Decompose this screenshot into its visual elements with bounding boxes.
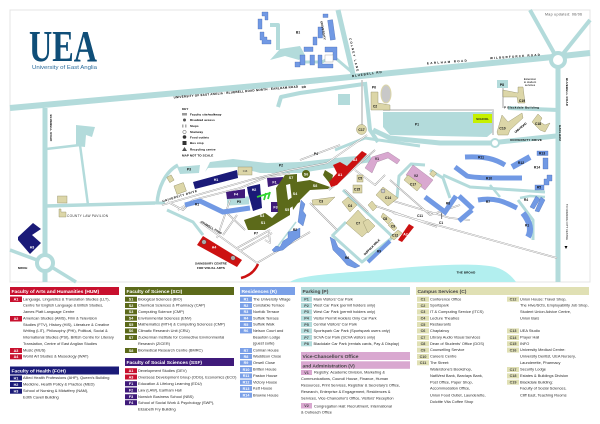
panel: Campus Services: C16 [510, 348, 516, 352]
panel: Campus Services: C11 [420, 361, 426, 365]
map frame [10, 10, 590, 282]
panel: Campus Services: Accommodation Office, [430, 386, 470, 391]
building: H3 [18, 223, 41, 254]
feature: school label box [473, 114, 492, 123]
science buildings: S4 [293, 192, 297, 196]
campus services buildings: C11 [417, 214, 423, 218]
panel: Residences: (guest suite) [253, 341, 275, 346]
panel: Parking: P1 [304, 298, 309, 302]
residence buildings: main group: R11 [478, 156, 484, 160]
panel: Campus Services: C13 [510, 329, 516, 333]
science buildings: S7 [289, 176, 293, 180]
residential buildings: north group [258, 12, 337, 68]
panel: Residences: Norfolk Terrace [253, 309, 279, 314]
panel: Parking: P2 [304, 304, 309, 308]
panel: Residences: R10 [243, 368, 249, 372]
panel: Residences: R14 [243, 394, 250, 398]
panel: Faculty of Social Sciences: Development Studies (DEV) [138, 368, 187, 373]
panel: Faculty of Arts and Humanities: A1 [14, 298, 18, 302]
social sciences buildings: F4 [234, 192, 238, 196]
road labels: TO NORWICH CITY CENTRE [565, 204, 569, 240]
road labels: WILBERFORCE ROAD [490, 53, 541, 60]
parking labels: P8 [500, 83, 504, 87]
campus services buildings: C3 [319, 200, 323, 204]
science buildings: S8 [313, 184, 317, 188]
panel: Campus Services: Sportspark [430, 303, 449, 308]
road labels: EARLHAM ROAD [427, 59, 468, 65]
panel: Residences: Waddison Close [253, 354, 281, 359]
panel: Vice-Chancellor's Office and Administration: Vice-Chancellor's Office [302, 354, 359, 360]
panel: Campus Services: Lecture Theatres [430, 315, 459, 320]
road labels: UNIVERSITY DRIVE [162, 189, 198, 203]
panel: Campus Services: UEA Studio [520, 328, 540, 333]
panel: Residences: R3 [244, 310, 248, 314]
road labels: FOR VISUAL ARTS [197, 266, 225, 270]
panel: Parking: P6 [304, 329, 309, 333]
road labels: services [525, 83, 536, 87]
panel: Campus Services: Prayer Hall [520, 335, 539, 340]
residence buildings: main group: R6 [345, 256, 349, 260]
panel: Vice-Chancellor's Office and Administration: and Administration (V) [302, 363, 355, 369]
logo: University of East Anglia: UEA [29, 22, 97, 71]
panel: Parking: P8 [304, 342, 309, 346]
panel: Faculty of Health: Medicine, Health Policy & Practice (MED) [23, 382, 95, 387]
arts building: A4 [197, 236, 258, 278]
panel: Campus Services: C19 [510, 380, 516, 384]
panel: Residences: R12 [243, 380, 249, 384]
panel: Residences: The University Village [253, 296, 291, 301]
key: Bus stop [190, 141, 204, 145]
residence buildings: main group: R10 [486, 176, 492, 180]
panel: Parking: P7 [304, 336, 309, 340]
panel: Vice-Chancellor's Office and Administration: Communications, Council House, Finance, Human [301, 376, 388, 381]
panel: Residences: Paston House [253, 373, 277, 378]
panel: Residences: R6 [244, 329, 248, 333]
panel: Campus Services: C7 [421, 336, 425, 340]
road labels: EARLHAM [558, 125, 562, 141]
panel: Campus Services: Student Union Advice Centre, [520, 309, 571, 314]
road labels: COUNTY LAW PAVILION [67, 214, 109, 218]
panel: Faculty of Arts and Humanities: A2 [14, 317, 18, 321]
panel: Faculty of Science: Biological Sciences (BIO) [138, 296, 183, 301]
panel: Faculty of Science: Environmental Sciences (ENV) [138, 315, 192, 320]
science buildings: S6 [304, 172, 308, 176]
campus services buildings: C15 [354, 188, 360, 192]
residence buildings: main group: R9 [377, 250, 381, 254]
panel: Campus Services: Post Office, Paper Shop, [430, 379, 473, 384]
panel: Faculty of Arts and Humanities: Music (MUS) [23, 347, 46, 352]
panel: Residences: Kett House [253, 386, 272, 391]
campus services buildings: C7 [356, 222, 360, 226]
residence buildings: main group: R14 [534, 166, 540, 170]
panel: Campus Services: Union Bars [520, 315, 539, 320]
residence buildings: main group: R13 [539, 152, 545, 156]
panel: Campus Services: Estates & Buildings Division [520, 373, 568, 378]
panel: Faculty of Arts and Humanities [10, 287, 119, 359]
map update note: Map updated: 06/06 [545, 12, 582, 16]
campus services buildings: C18 [535, 122, 541, 126]
road labels: UNIV ROAD [514, 121, 528, 134]
panel: Faculty of Health: H1 [14, 376, 18, 380]
panel: Campus Services: C1 [421, 298, 425, 302]
campus services buildings: C19 [519, 99, 525, 103]
panel: Campus Services: C14 [510, 336, 517, 340]
panel: Campus Services: Library Audio Visual Services [430, 335, 480, 340]
panel: Residences: Beaufoin Lodge [253, 335, 280, 340]
panel: Faculty of Health: Allied Health Professions (AHP), Queen's Building [23, 375, 109, 380]
panel: Faculty of Science: S8 [129, 349, 133, 353]
panel: Vice-Chancellor's Office and Administration: Resources, Print Services, Registrar & Secretary's Office, [301, 382, 400, 387]
road labels: Extension [524, 77, 537, 81]
arts buildings: A1, A3 [329, 151, 367, 187]
building: H2 navy [247, 184, 262, 211]
panel: Parking: P4 [304, 316, 310, 320]
campus services buildings: C8 [383, 217, 387, 221]
panel: Residences: R9 [244, 361, 248, 365]
panel: Faculty of Health: Edith Cavell Building [23, 395, 59, 400]
panel: Campus Services: C9 [421, 348, 425, 352]
residence buildings: main group: R5 [537, 186, 541, 190]
panel: Faculty of Arts and Humanities: Writing (LIT), Philosophy (PHI), Political, Social & [23, 328, 108, 333]
panel: Parking: Parking (P) [302, 289, 329, 295]
panel: Parking: SCVA Car Park (SCVA visitors only) [314, 335, 376, 340]
residence buildings: main group: R4 [524, 198, 528, 202]
parking labels: P1 [415, 122, 419, 126]
panel: Parking [301, 287, 410, 346]
panel: Faculty of Science: Computing Science (CMP) [138, 309, 185, 314]
panel: Residences: R1 [244, 298, 248, 302]
panel: Campus Services: C2 [421, 304, 425, 308]
panel: Faculty of Health: H2 [14, 383, 18, 387]
panel: Residences: Colman House [253, 348, 279, 353]
panel: Campus Services: Dean of Students' Office (DOS) [430, 341, 485, 346]
campus services buildings: C2 [373, 104, 377, 108]
panel: Faculty of Social Sciences [125, 358, 237, 412]
panel: Faculty of Science: S7 [129, 336, 133, 340]
panel: Faculty of Arts and Humanities: Centre for English Language & British Studies, [23, 303, 103, 308]
panel: Faculty of Science: Zuckerman Institute for Connective Environmental [138, 335, 224, 340]
panel: Faculty of Arts and Humanities: World Art Studies & Museology (WAT) [23, 354, 89, 359]
campus services buildings: C10 [499, 126, 506, 130]
panel: Vice-Chancellor's Office and Administration: Registry: Academic Division, Marketing & [314, 370, 385, 375]
panel: Residences: Suffolk Walk [253, 322, 274, 327]
panel: Residences: R7 [244, 349, 248, 353]
panel: Faculty of Social Sciences: F3 [129, 395, 133, 399]
science buildings: S1 [261, 221, 265, 225]
panel: Parking: West Car Park (permit holders only) [314, 303, 376, 308]
arts building: A2 [398, 224, 414, 242]
panel: Residences: R4 [244, 316, 249, 320]
panel: Campus Services: Campus Services (C) [418, 289, 467, 295]
panel: Parking: Central Visitors' Car Park [314, 322, 357, 327]
road labels: MRUH [18, 266, 27, 270]
panel: Campus Services: The Street: [430, 360, 449, 365]
panel: Campus Services: C17 [510, 368, 516, 372]
panel: Faculty of Science [125, 287, 234, 353]
panel: Residences: Residences (R) [242, 289, 277, 295]
panel: Parking: Sportspark Car Park (Sportspark users only) [314, 328, 391, 333]
road labels: UNIVERSITY OF EAST ANGLIA · BLUEBELL ROAD NORTH · EARLHAM ROAD [173, 85, 299, 99]
key: Faculty site/walkway [190, 112, 222, 116]
road labels: BLUEBELL RD [352, 70, 383, 78]
panel: Faculty of Science: S3 [129, 310, 133, 314]
campus services buildings: C9 [391, 224, 395, 228]
panel: Campus Services: The Hive/SOS, Employability Job Shop, [520, 303, 589, 308]
panel: Faculty of Science: Faculty of Science (SCI) [126, 289, 183, 295]
panel: Faculty of Arts and Humanities: A3 [14, 349, 18, 353]
panel: Campus Services: C18 [510, 374, 516, 378]
panel: Faculty of Arts and Humanities: American Studies (AMS), Film & Television [23, 316, 97, 320]
county law buildings [58, 196, 67, 217]
panel: Faculty of Science: S2 [129, 304, 133, 308]
panel: Residences: Nelson Court and [253, 328, 283, 333]
building: H1 navy bar [193, 170, 238, 189]
residence buildings: main group: R7 [486, 200, 490, 204]
residence buildings: main group: R8 [446, 202, 450, 206]
panel: Vice-Chancellor's Office and Administration: Congregation Hall: Recruitment, International [314, 403, 392, 408]
panel: Campus Services: IT & Computing Service (ITCS) [430, 309, 484, 314]
panel: Faculty of Science: S6 [129, 329, 133, 333]
panel: Faculty of Social Sciences: A3 [129, 375, 133, 379]
campus services buildings: C17 [410, 182, 416, 186]
panel: Campus Services: Union Food Outlet, Launderette, [430, 392, 486, 397]
panel: Campus Services: Union House: Travel Shop, [520, 296, 566, 301]
road labels: P Blackdale Building [504, 106, 539, 110]
road labels: SUFFOLK WALK [363, 237, 382, 256]
panel: Faculty of Social Sciences: A1 [129, 369, 133, 373]
panel: Campus Services [416, 287, 589, 404]
administration buildings: V1, V2 [365, 152, 433, 190]
science buildings: S5 [285, 208, 289, 212]
panel: Parking: Blackdale Car Park (rentals cards, Pay & Display) [314, 341, 400, 346]
panel: Faculty of Social Sciences: Education & Lifelong Learning (EDU) [138, 381, 203, 386]
panel: Residences: R13 [243, 387, 249, 391]
campus services buildings: C17 [358, 128, 365, 132]
panel: Campus Services: Careers Centre [430, 354, 457, 359]
panel: Faculty of Arts and Humanities: International Studies (PSI), British Centre for Literary [23, 335, 114, 340]
panel: Faculty of Science: Research (ZICER) [138, 341, 171, 346]
road labels: COLNEY LANE [348, 38, 360, 72]
panel: Faculty of Science: Biomedical Research Centre (BMRC) [138, 348, 203, 353]
key [182, 107, 222, 158]
panel: Campus Services: INFO [520, 341, 529, 346]
parking labels: P5 [237, 200, 241, 204]
social sciences buildings: F1 [272, 180, 277, 184]
residence buildings: main group: R12 [518, 161, 524, 165]
key: Disabled access [190, 118, 215, 122]
science buildings: S3 [260, 214, 264, 218]
panel: Residences [240, 287, 295, 398]
residence buildings: main group: R1 [525, 224, 529, 228]
panel: Faculty of Science: Climatic Research Unit (CRU) [138, 328, 190, 333]
panel: Faculty of Arts and Humanities: Language, Linguistics & Translation Studies (LLT), [23, 296, 110, 301]
panel: Campus Services: C6 [421, 329, 425, 333]
panel: Parking: P5 [304, 323, 309, 327]
panel: Faculty of Health: H3 [14, 390, 18, 394]
key: Steps [190, 124, 199, 128]
campus services buildings: C4 [348, 204, 352, 208]
panel: Parking: P3 [304, 310, 309, 314]
building: H3: H3 [30, 246, 34, 250]
road labels: BLUEBELL ROAD [565, 78, 569, 107]
panel: Residences: R11 [243, 374, 249, 378]
panel: Campus Services: Restaurants [430, 322, 451, 327]
panel: Faculty of Science: Chemical Sciences & Pharmacy (CAP) [138, 303, 206, 308]
panel: Faculty of Social Sciences: Overseas Development Group (ODG), Economics (ECO) [138, 374, 237, 379]
road labels: RD [301, 85, 307, 89]
panel: Faculty of Social Sciences: F1 [129, 382, 133, 386]
residence buildings: main group: R2 [293, 228, 297, 232]
road labels: SAINSBURY CENTRE [195, 262, 227, 266]
arts buildings: A1, A3: A1 [338, 173, 342, 177]
road labels: ATHWELL PASS [200, 220, 223, 235]
road labels: BLUEBELL ROAD [49, 115, 53, 142]
panel: Faculty of Health [10, 366, 119, 400]
panel: Faculty of Arts and Humanities: Translation, Centre of East Anglian Studies [23, 341, 97, 346]
panel: Faculty of Arts and Humanities: Faculty of Arts and Humanities (HUM) [12, 289, 99, 295]
panel: Faculty of Science: S5 [129, 323, 133, 327]
parking labels: P3 [187, 168, 191, 172]
parking labels: P7 [254, 232, 258, 236]
campus services buildings: C12 [392, 234, 398, 238]
panel: Residences: Victory House [253, 379, 277, 384]
parking labels: P2 [279, 164, 283, 168]
administration buildings: V1, V2: V1 [375, 157, 379, 161]
panel: Vice-Chancellor's Office and Administration: Research, Enterprise & Engagement, Residences & [301, 389, 391, 394]
road labels: UNIVERSITY DRIVE [510, 138, 542, 142]
panel: Residences: R5 [244, 323, 248, 327]
panel: Campus Services: Cliff East, Teaching Rooms [520, 392, 567, 397]
panel: Vice-Chancellor's Office and Administration: V1 [304, 371, 309, 375]
campus services buildings: C1 [439, 221, 443, 225]
panel: Campus Services: Counselling Service [430, 347, 464, 352]
panel: Faculty of Social Sciences: Faculty of Social Sciences (SSF) [126, 360, 202, 366]
residence buildings: main group [185, 151, 552, 268]
campus services buildings [167, 85, 550, 240]
arts building: A2: A2 [403, 232, 408, 236]
building: H1 navy bar: H1 [214, 178, 218, 182]
panel: Campus Services: C3 [421, 310, 425, 314]
panel: Faculty of Social Sciences: F4 [129, 401, 134, 405]
panel: Residences: R8 [244, 355, 248, 359]
panel: Parking: Main Visitors' Car Park [314, 296, 353, 301]
key: Recycling centre [190, 147, 216, 151]
panel: Campus Services: C4 [421, 316, 426, 320]
panel: Residences: Britten House [253, 367, 277, 372]
panel: Vice-Chancellor's Office and Administration: Services, Vice-Chancellor's Office, Visitors' Reception [301, 395, 394, 400]
panel: Faculty of Arts and Humanities: A4 [14, 355, 19, 359]
panel: Campus Services: NatWest Bank, Barclays Bank, [430, 373, 483, 378]
residential buildings: north group: UNIVERSITY [319, 21, 327, 40]
campus services buildings: C16 [243, 170, 248, 173]
campus services buildings: C14 [385, 196, 391, 200]
social sciences buildings [226, 177, 283, 212]
panel: Faculty of Arts and Humanities: Studies (FTV), History (HIS), Literature & Creative [23, 322, 109, 327]
building: H2 navy: H2 [252, 188, 256, 192]
panel: Vice-Chancellor's Office and Administration: & Outreach Office [301, 409, 332, 414]
panel: Faculty of Social Sciences: Law (LAW), Earlham Hall [138, 387, 182, 392]
residence buildings: main group: R1 [195, 202, 199, 206]
panel: Residences: Suffolk Terrace [253, 315, 279, 320]
panel: Campus Services: Conference Office [430, 296, 461, 301]
panel: Campus Services: Security Lodge [520, 367, 546, 372]
key: Stairway [190, 130, 203, 134]
panel: Vice-Chancellor's Office and Administration: V2 [304, 404, 309, 408]
panel: Campus Services: C10 [420, 355, 426, 359]
panel: Campus Services: Waterstone's Bookshop, [430, 367, 472, 372]
panel: Faculty of Health: Faculty of Health (FOH) [12, 369, 66, 375]
panel: Faculty of Health: School of Nursing & Midwifery (NAM), [23, 388, 88, 393]
campus services buildings: C5 [358, 176, 362, 180]
panel: Campus Services: C5 [421, 323, 425, 327]
key: KEY [182, 107, 188, 111]
panel: Campus Services: Faculty of Social Sciences, [520, 386, 566, 391]
footpaths [162, 80, 557, 263]
panel: Faculty of Science: S1 [129, 298, 133, 302]
panel: Parking: Visitor Permit Holders Only Car Park [314, 315, 377, 320]
panel: Residences: Orwell Close [253, 360, 275, 365]
panel: Campus Services: University Dentist, UEA Nursery, [520, 354, 576, 359]
panel: Faculty of Social Sciences: Norwich Business School (NBS) [138, 394, 194, 399]
panel: Faculty of Social Sciences: School of Social Work & Psychology (SWP), [138, 400, 214, 405]
panel: Campus Services: Chaplaincy [430, 328, 449, 333]
key: Food outlets [190, 136, 209, 140]
road labels: to student [524, 80, 536, 84]
arts building: A4: A4 [212, 246, 216, 250]
road network [10, 10, 590, 282]
parking labels: P4 [314, 152, 318, 156]
panel: Faculty of Social Sciences: F2 [129, 388, 133, 392]
panel: Faculty of Arts and Humanities: James Platt Language Centre [23, 309, 74, 314]
panel: Campus Services: University Medical Centre: [520, 347, 565, 352]
panel: Faculty of Science: Mathematics (MTH) & Computing Sciences (CMP) [138, 322, 226, 327]
panel: Campus Services: Blackdale Building: [520, 379, 553, 384]
feature: school label box: SCHOOL [476, 117, 489, 121]
panel: Campus Services: C15 [510, 342, 516, 346]
panel: Residences: Browne House [253, 392, 279, 397]
residential buildings: north group: B1 [296, 30, 300, 34]
panel: Residences: Constable Terrace [253, 303, 285, 308]
road labels [18, 38, 569, 270]
science buildings [244, 170, 333, 230]
panel: Campus Services: Dolcitte Vita Coffee Shop [430, 399, 473, 404]
panel: Campus Services: C12 [510, 298, 516, 302]
panel: Residences: R2 [244, 304, 248, 308]
administration buildings: V1, V2: V2 [414, 174, 418, 178]
logo: University of East Anglia: University of East Anglia [32, 65, 98, 71]
parking labels [187, 83, 504, 236]
lake: the broad [290, 265, 516, 282]
key: MAP NOT TO SCALE [182, 154, 213, 158]
arts buildings: A1, A3: A3 [353, 158, 357, 162]
panel: Vice-Chancellor's Office and Administration [301, 352, 410, 414]
panel: Faculty of Social Sciences: Elizabeth Fry Building [138, 407, 176, 412]
panel: Parking: West Car Park (permit holders only) [314, 309, 376, 314]
social sciences buildings: F3 [273, 206, 278, 210]
panel: Campus Services: C8 [421, 342, 425, 346]
panel: Faculty of Science: S4 [129, 316, 134, 320]
parking labels: P6 [372, 86, 376, 90]
panel: Campus Services: Launderette, Pharmacy [520, 360, 560, 365]
lake: the broad: THE BROAD [457, 270, 476, 274]
